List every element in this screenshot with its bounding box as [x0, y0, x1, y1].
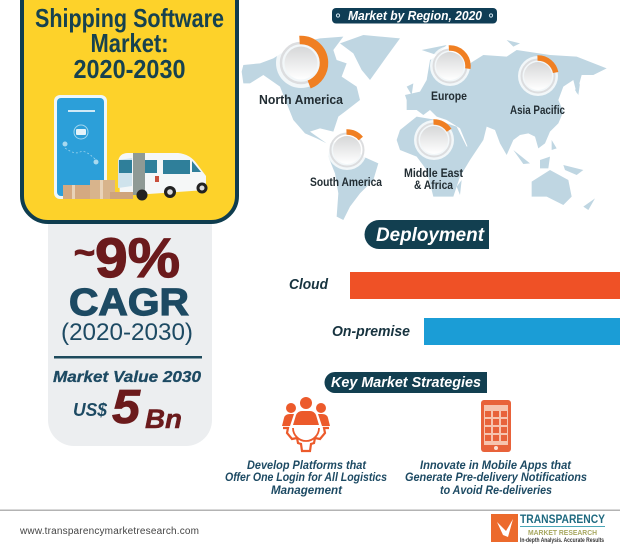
logo: In-depth Analysis. Accurate Results — [520, 538, 605, 544]
website url: www.transparencymarketresearch.com — [19, 526, 199, 537]
label: On-premise: On-premise — [332, 324, 410, 340]
icon: parcels — [63, 180, 133, 199]
heading: market by region: Market by Region, 2020 — [348, 9, 482, 23]
logo: TRANSPARENCY — [520, 512, 605, 526]
strategy text: platforms — [225, 460, 387, 497]
strategy text: mobile apps — [405, 460, 587, 497]
logo: MARKET RESEARCH — [528, 528, 597, 537]
growth rate: 9% — [95, 226, 180, 289]
icon: team gear — [282, 397, 330, 451]
bar chart: deployment — [289, 272, 620, 345]
panel: title card — [22, 0, 237, 222]
label: South America: South America — [310, 177, 383, 189]
strategy text: platforms: Management — [271, 485, 343, 497]
bar: On-premise — [424, 318, 620, 345]
donut: North America — [276, 38, 326, 88]
label: Asia Pacific: Asia Pacific — [510, 105, 566, 117]
bar: Cloud — [350, 272, 620, 299]
CAGR period: (2020-2030) — [61, 319, 193, 346]
strategy text: mobile apps: Innovate in Mobile Apps that — [420, 460, 572, 472]
heading: deployment — [365, 220, 489, 249]
donut: Europe — [430, 46, 470, 86]
heading: key market strategies: Key Market Strategies — [331, 374, 481, 391]
heading: deployment: Deployment — [376, 225, 485, 246]
label: Middle East and Africa: & Africa — [414, 180, 454, 192]
logo — [491, 512, 605, 544]
strategy text: platforms: Develop Platforms that — [247, 460, 367, 472]
CAGR label: CAGR — [69, 282, 189, 324]
growth rate: ~ — [74, 234, 95, 272]
icon: mobile apps — [481, 400, 511, 452]
strategy text: platforms: Offer One Login for All Logistics — [225, 472, 387, 484]
label: Middle East and Africa: Middle East — [404, 168, 463, 180]
title: 2020-2030 — [74, 54, 186, 84]
icon: delivery van — [118, 153, 208, 200]
panel: stats — [48, 215, 212, 446]
donut: Asia Pacific — [518, 56, 558, 96]
world map — [242, 35, 607, 220]
label: Middle East and Africa — [404, 168, 463, 192]
market value number: 5 — [112, 381, 141, 434]
market value label: Market Value 2030 — [53, 369, 201, 386]
icon: smartphone — [54, 95, 107, 199]
title: Shipping Software — [35, 3, 224, 33]
donut: Middle East and Africa — [414, 120, 454, 160]
currency: US$ — [73, 400, 108, 420]
label: North America: North America — [259, 92, 344, 107]
donut: South America — [327, 130, 367, 170]
label: Europe: Europe — [431, 91, 467, 103]
market value unit: Bn — [145, 404, 182, 434]
strategy text: mobile apps: Generate Pre-delivery Notifications — [405, 472, 587, 484]
strategy text: mobile apps: to Avoid Re-deliveries — [440, 485, 552, 497]
title: Market: — [90, 28, 168, 58]
label: Cloud: Cloud — [289, 277, 329, 293]
title — [35, 3, 224, 84]
